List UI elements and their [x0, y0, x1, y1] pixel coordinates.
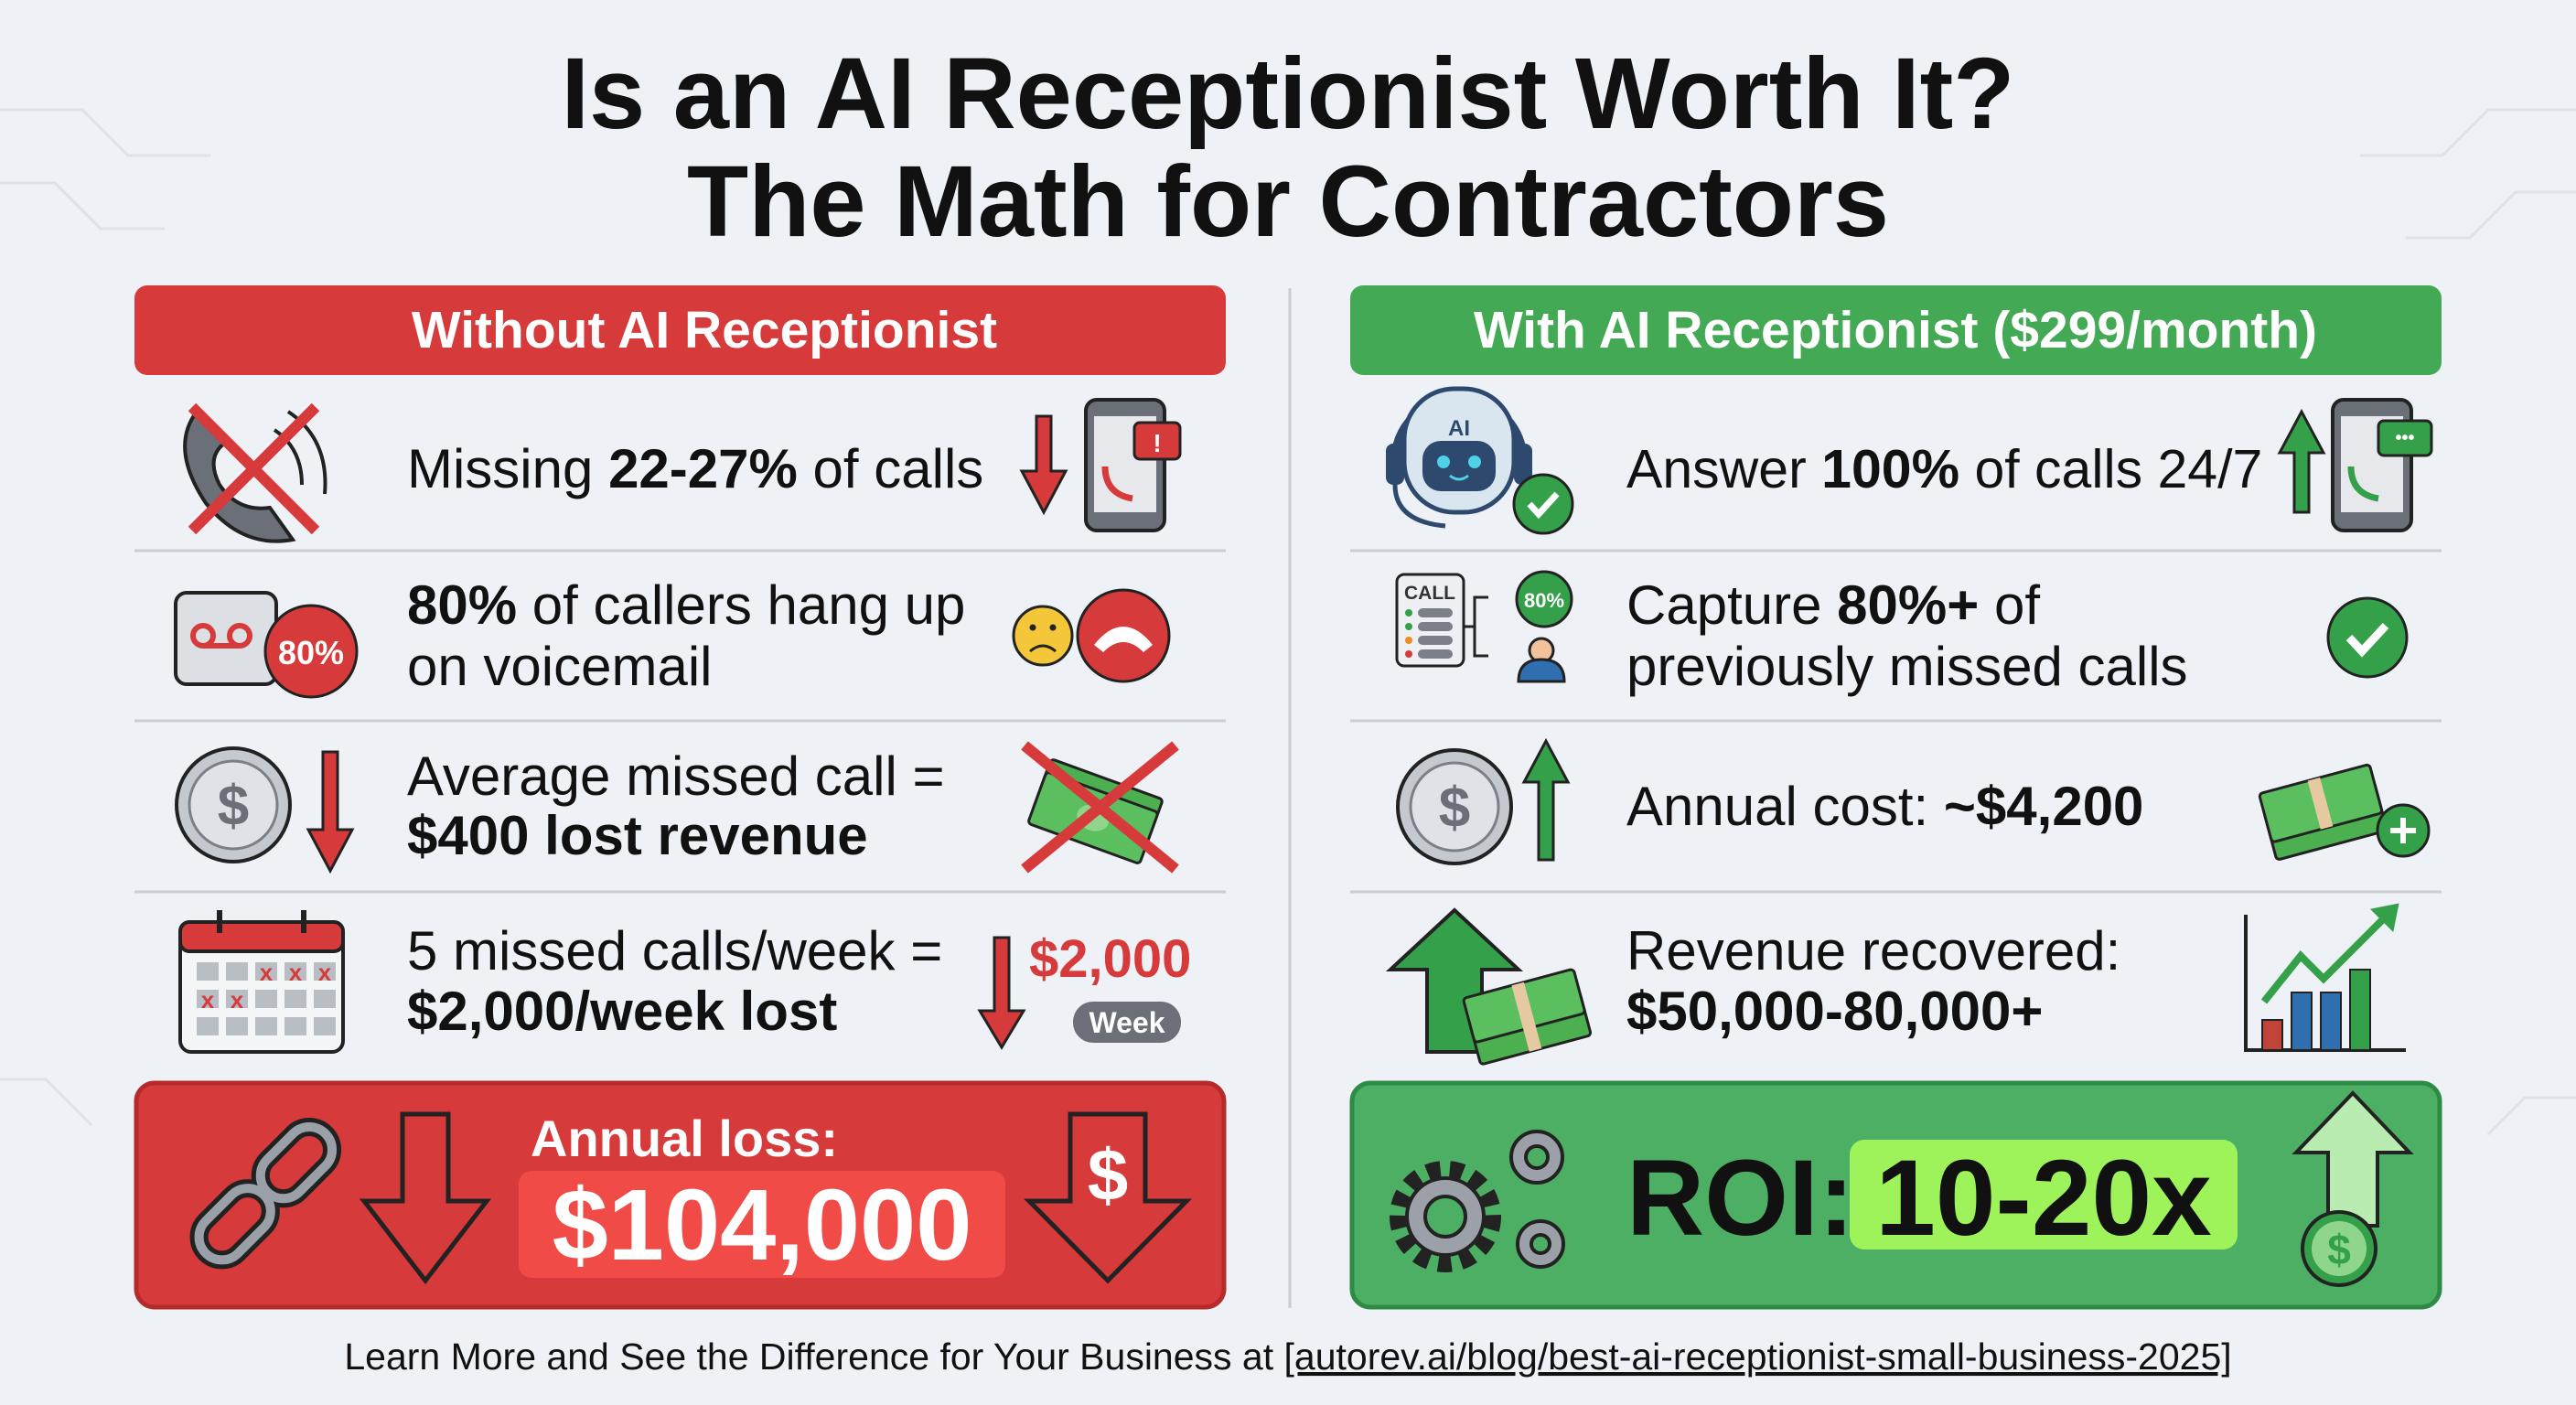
left row 4: weekly loss	[180, 910, 1191, 1052]
callout: annual loss: $104,000	[553, 1169, 971, 1282]
callout: ROI	[1352, 1083, 2440, 1307]
icon: call list routing: CALL	[1404, 583, 1455, 604]
icon: arrow up with coin: $	[2327, 1226, 2351, 1273]
icon: phone alert: !	[1153, 429, 1162, 457]
left row 2: voicemail: 80% of callers hang up	[407, 574, 965, 636]
icon: dollar arrow down: $	[1088, 1134, 1128, 1216]
left row 3: average missed call: Average missed call =	[407, 745, 945, 807]
left row 4: weekly loss: 5 missed calls/week =	[407, 920, 942, 981]
icon: arrow + $2,000 week	[980, 929, 1191, 1047]
icon: AI robot with headset	[1386, 389, 1572, 533]
right row 2: capture: previously missed calls	[1626, 636, 2188, 697]
icon: calendar: x	[231, 986, 244, 1014]
left row 2: voicemail: on voicemail	[407, 636, 712, 697]
left row 2: voicemail	[176, 574, 1169, 697]
icon: calendar: x	[289, 959, 303, 986]
icon: coin and down arrow: $	[218, 775, 249, 838]
right row 2: capture: Capture 80%+ of	[1626, 574, 2040, 636]
header: with: With AI Receptionist ($299/month)	[1474, 301, 2317, 359]
header: without	[134, 285, 1226, 375]
icon: bar chart	[2246, 906, 2406, 1050]
callout: ROI: 10-20x	[1875, 1138, 2212, 1259]
icon: coin and up arrow: $	[1439, 777, 1470, 840]
icon: calendar: x	[260, 959, 274, 986]
icon: crossed phone	[185, 407, 326, 542]
header: with	[1350, 285, 2442, 375]
icon: coin and up arrow	[1398, 741, 1568, 863]
icon: call list routing	[1397, 572, 1572, 681]
icon: AI robot with headset: AI	[1448, 416, 1470, 441]
title	[562, 38, 2014, 258]
right row 1: answer 100%: Answer 100% of calls 24/7	[1626, 439, 2262, 499]
icon: hang up	[1078, 590, 1169, 681]
icon: calendar: x	[201, 986, 215, 1014]
icon: red arrow down	[1022, 416, 1066, 512]
icon: money plus	[2259, 764, 2429, 860]
left row 1: missing calls: Missing 22-27% of calls	[407, 438, 983, 499]
right row 1: answer 100%	[1386, 389, 2431, 533]
icon: sad face	[1014, 606, 1072, 665]
callout: annual loss	[136, 1083, 1224, 1307]
icon: broken chain	[189, 1118, 341, 1270]
icon: gears	[1400, 1132, 1563, 1267]
icon: arrow up with coin	[2296, 1093, 2410, 1285]
left row 1: missing calls	[185, 400, 1180, 542]
icon: calendar	[180, 910, 343, 1052]
icon: phone alert	[1086, 400, 1180, 531]
right row 4: revenue recovered: $50,000-80,000+	[1626, 981, 2043, 1042]
footer: Learn More and See the Difference for Your Business at [autorev.ai/blog/best-ai-receptionist-small-business-2025]	[344, 1335, 2232, 1378]
icon: coin and down arrow	[177, 748, 352, 871]
icon: arrow + $2,000 week: Week	[1089, 1006, 1165, 1039]
left row 3: average missed call: $400 lost revenue	[407, 805, 868, 866]
right row 3: annual cost	[1398, 741, 2429, 863]
title: Is an AI Receptionist Worth It?	[562, 38, 2014, 150]
icon: green arrow up	[2280, 412, 2324, 512]
icon: phone with chat: •••	[2395, 428, 2415, 448]
icon: check circle	[2328, 598, 2407, 677]
icon: arrow + $2,000 week: $2,000	[1029, 929, 1191, 989]
left row 3: average missed call	[177, 745, 1175, 871]
callout: annual loss: Annual loss:	[531, 1110, 838, 1167]
icon: dollar arrow down	[1029, 1114, 1186, 1281]
icon: call list routing: 80%	[1524, 589, 1564, 612]
right row 4: revenue recovered: Revenue recovered:	[1626, 920, 2120, 981]
callout: ROI: ROI:	[1626, 1138, 1854, 1259]
vertical divider	[1288, 288, 1292, 1308]
title: The Math for Contractors	[687, 145, 1889, 258]
right row 3: annual cost: Annual cost: ~$4,200	[1626, 776, 2143, 837]
left row 4: weekly loss: $2,000/week lost	[407, 981, 837, 1042]
header: without: Without AI Receptionist	[412, 301, 997, 359]
icon: voicemail 80%	[176, 593, 357, 697]
right row 4: revenue recovered	[1390, 906, 2406, 1065]
icon: calendar: x	[318, 959, 332, 986]
icon: arrow up with money	[1390, 910, 1591, 1065]
right row 2: capture	[1397, 572, 2407, 697]
icon: crossed money	[1025, 745, 1175, 869]
icon: outline arrow down	[364, 1114, 487, 1281]
icon: phone with chat	[2333, 400, 2431, 531]
icon: voicemail 80%: 80%	[278, 634, 344, 671]
